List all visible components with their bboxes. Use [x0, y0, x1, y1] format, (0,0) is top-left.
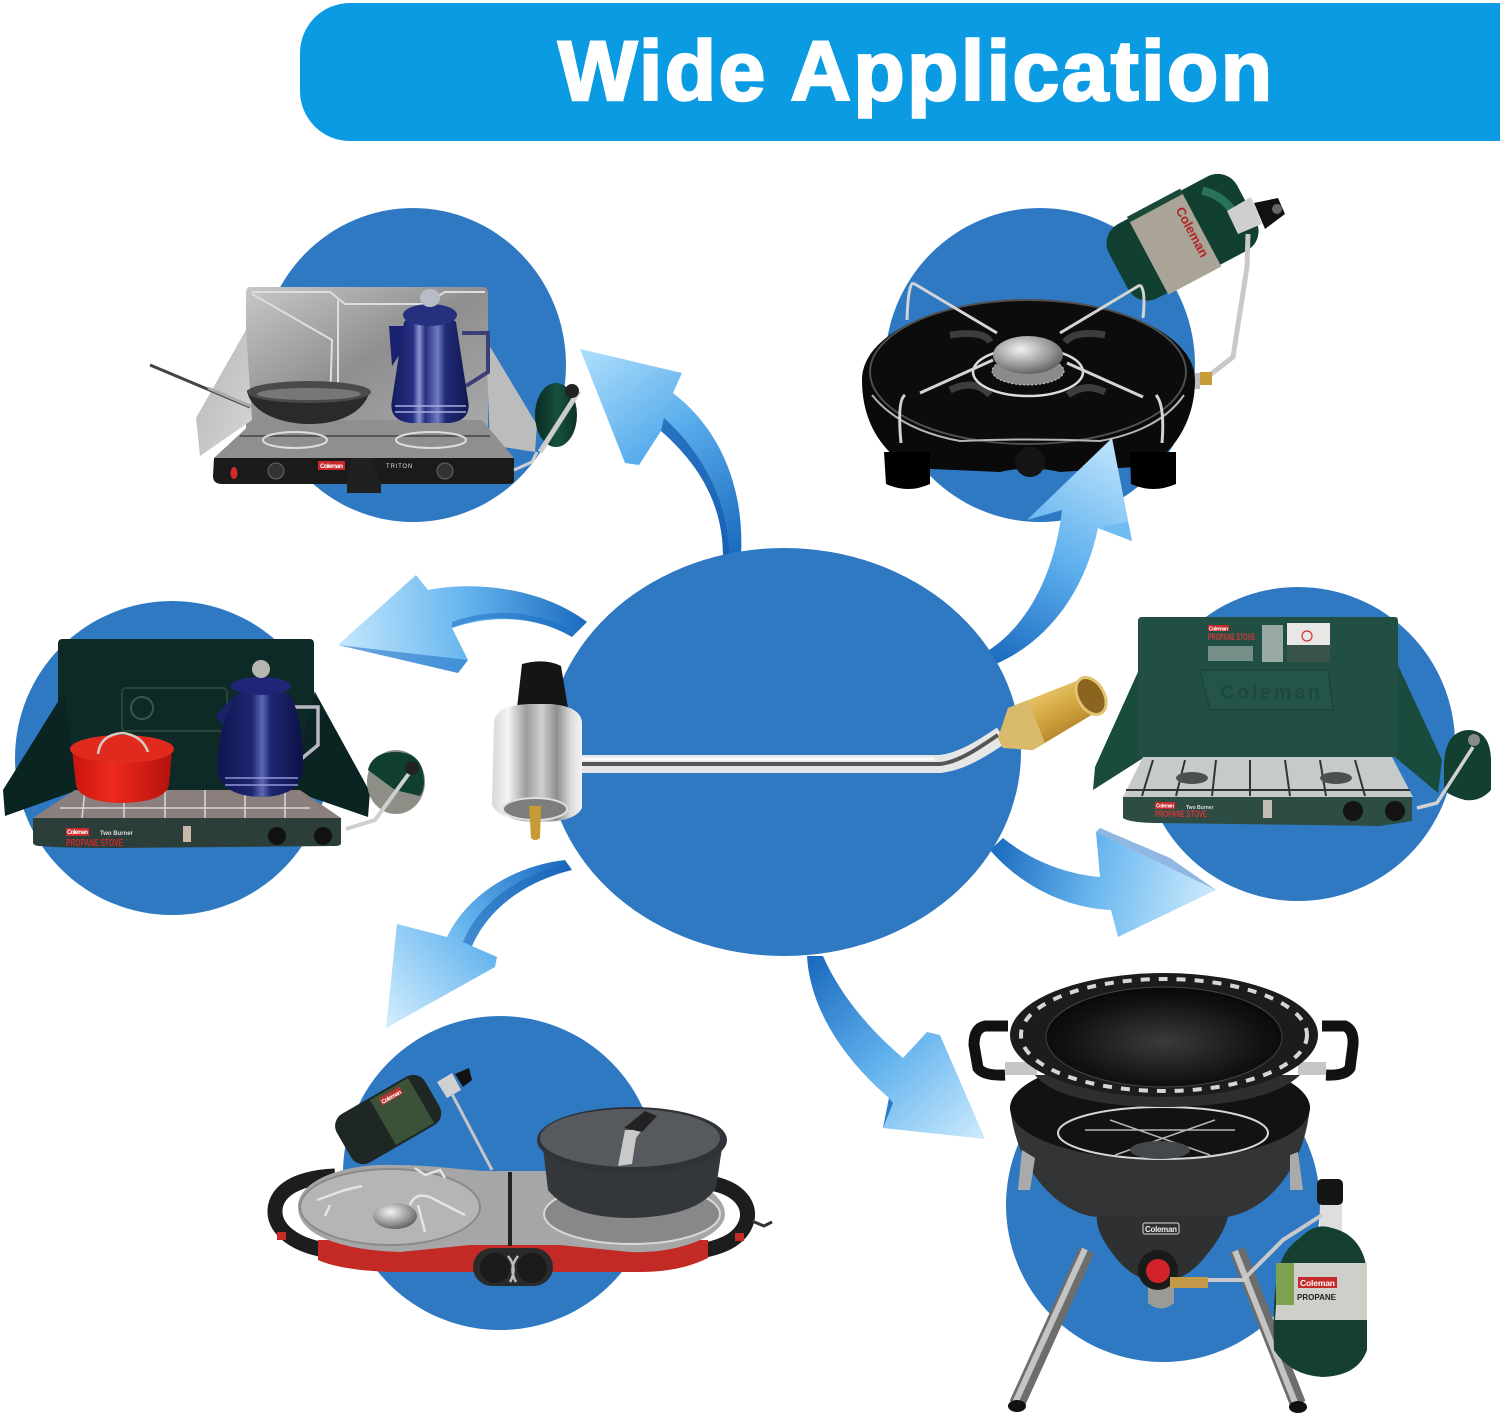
left wing	[1093, 663, 1148, 790]
top rim	[870, 300, 1186, 444]
left grate wires	[317, 1168, 465, 1232]
brass fitting	[1186, 372, 1212, 389]
pan	[150, 365, 371, 424]
burner ring	[973, 348, 1083, 396]
arrow: to right stove	[990, 828, 1216, 937]
grate deck	[1123, 757, 1413, 797]
left wing	[3, 692, 78, 816]
embossed plate	[122, 688, 227, 731]
right wing	[486, 340, 537, 452]
hinge	[508, 1172, 512, 1246]
central adapter hose	[492, 661, 1112, 840]
header banner	[300, 3, 1500, 141]
recess shapes	[950, 334, 1105, 395]
blue circle: bottom left	[343, 1016, 657, 1330]
arrow: to top left stove	[580, 349, 741, 556]
tube	[580, 735, 1002, 764]
black cap	[517, 661, 568, 708]
lid	[1138, 617, 1398, 757]
silver cylinder	[492, 704, 582, 822]
left wing	[196, 330, 252, 456]
stove: green two burner with red pot and kettle	[3, 639, 425, 849]
stove: round black grill on legs	[974, 973, 1367, 1413]
gas bottle	[367, 750, 425, 814]
silver deck	[298, 1165, 725, 1252]
red pot	[70, 733, 174, 803]
center blue circle	[547, 548, 1021, 956]
deck	[214, 420, 514, 458]
banner pill	[300, 3, 1500, 141]
knobs	[268, 463, 284, 479]
lid	[58, 639, 314, 792]
brass fitting	[1170, 1277, 1208, 1288]
bowl interior	[1010, 1056, 1310, 1160]
red base band	[318, 1240, 708, 1272]
gas bottle	[535, 383, 577, 447]
lid	[246, 287, 488, 430]
gas bottle: Coleman	[1173, 204, 1212, 260]
coleman badge front: Coleman	[1156, 804, 1174, 810]
two burner text: Two Burner	[100, 831, 134, 837]
left leg	[1015, 1249, 1087, 1404]
pot grate wires	[900, 283, 1163, 443]
blue circle: bottom right	[1006, 1048, 1320, 1362]
latch	[183, 826, 191, 842]
wand	[514, 452, 537, 470]
title: Wide Application	[558, 24, 1272, 118]
gas bottle: Coleman	[381, 1090, 403, 1106]
control knob housing	[473, 1248, 553, 1286]
brass connector	[998, 672, 1112, 750]
chrome ring	[1058, 1107, 1268, 1159]
latch	[347, 458, 381, 493]
propane stove heading: PROPANE STOVE	[1208, 632, 1255, 642]
igniter	[230, 467, 238, 479]
coleman badge	[66, 828, 89, 836]
two burner text: Two Burner	[1186, 805, 1213, 811]
triton text: TRITON	[386, 464, 413, 470]
arrow: to top right stove	[986, 438, 1132, 664]
embossed plate	[1200, 670, 1333, 710]
gas bottle: PROPANE	[1297, 1293, 1337, 1302]
label band	[1127, 189, 1221, 295]
propane stove text: PROPANE STOVE	[66, 837, 123, 849]
stove: green two burner, empty	[1093, 617, 1491, 826]
propane stove text: PROPANE STOVE	[1155, 809, 1207, 819]
regulator	[1227, 197, 1285, 234]
knobs	[268, 827, 286, 845]
blue circle: left	[15, 601, 329, 915]
pot	[537, 1107, 727, 1218]
control knob	[1015, 447, 1045, 477]
coleman badge: Coleman	[320, 463, 343, 470]
grate deck	[33, 790, 341, 818]
hook	[752, 1221, 772, 1226]
right wing	[290, 692, 370, 817]
coleman badge: Coleman	[1209, 626, 1228, 632]
gas bottle: Coleman	[1300, 1278, 1335, 1288]
right grate ring	[544, 1184, 720, 1244]
wand tube	[1206, 234, 1248, 378]
wok lid	[974, 973, 1353, 1107]
wand	[1208, 1215, 1322, 1280]
front panel	[33, 818, 341, 848]
left handle	[275, 1176, 335, 1250]
feet	[884, 452, 930, 489]
middle leg	[1148, 1280, 1174, 1308]
right handle	[705, 1184, 748, 1250]
gas bottle	[330, 1068, 492, 1170]
control housing	[1097, 1216, 1228, 1282]
arrow: to bottom left stove	[386, 860, 572, 1028]
blue circle: right	[1141, 587, 1455, 901]
stove: single black burner with tilted bottle	[862, 164, 1285, 489]
front panel	[1123, 797, 1412, 826]
warning panel	[1287, 623, 1330, 662]
bowl	[1010, 1105, 1310, 1217]
handles	[974, 1026, 1008, 1075]
latch	[1263, 800, 1272, 818]
burner dome	[993, 336, 1063, 374]
knobs	[1343, 801, 1363, 821]
right wing	[1390, 663, 1442, 793]
black burner body	[862, 300, 1195, 472]
coleman badge: Coleman	[1145, 1225, 1177, 1234]
gas bottle	[1098, 164, 1267, 310]
arrow: to bottom right stove	[807, 956, 985, 1139]
stove: folding red and silver stove	[275, 1068, 772, 1286]
leg caps	[1008, 1400, 1307, 1413]
gas bottle	[1274, 1179, 1367, 1377]
red end tabs	[277, 1232, 744, 1241]
kettle	[389, 289, 488, 423]
wand	[346, 768, 413, 829]
igniter knob	[1138, 1250, 1178, 1290]
gas bottle	[1444, 730, 1491, 800]
brass pin	[529, 806, 541, 840]
right leg	[1235, 1250, 1298, 1405]
side clips	[1018, 1150, 1303, 1190]
arrow: to left stove	[338, 575, 587, 673]
left burner ring	[300, 1169, 480, 1245]
wand	[1417, 747, 1473, 808]
coleman badge: Coleman	[67, 830, 88, 836]
blue circle: top right	[885, 208, 1195, 522]
instruction text	[1208, 625, 1283, 662]
cylinder opening	[503, 798, 567, 820]
embossed plate: Coleman	[1220, 682, 1320, 704]
blue circle: top left	[260, 208, 566, 522]
left burner cap	[373, 1203, 417, 1229]
burner	[1130, 1141, 1190, 1159]
stove: silver triton with pan and kettle	[150, 287, 579, 493]
coleman badge	[318, 461, 345, 470]
kettle	[215, 660, 318, 797]
